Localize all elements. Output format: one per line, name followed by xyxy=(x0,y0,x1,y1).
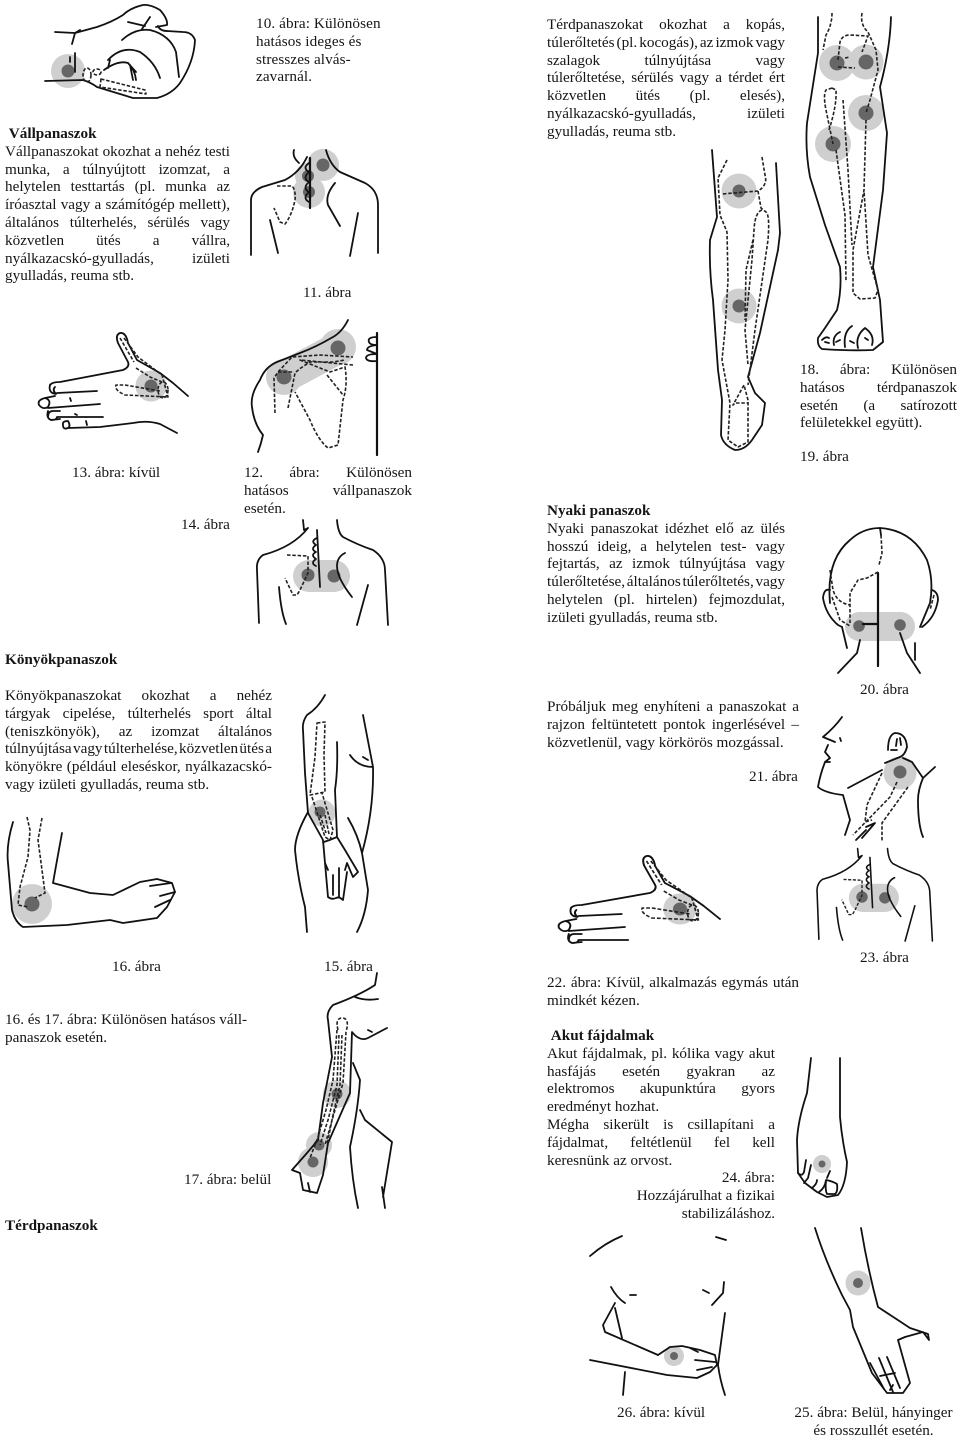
icon: figure 16 bent elbow xyxy=(8,817,175,927)
text block: acute pain: keresnünk az orvost. xyxy=(547,1152,672,1169)
caption: figure 20: 20. ábra xyxy=(860,681,909,698)
icon: figure 14 upper back xyxy=(257,520,388,625)
caption: figure 15: 15. ábra xyxy=(324,958,373,975)
icon: figure 26 abdomen with hand xyxy=(590,1236,726,1395)
icon: figure 12 shoulder xyxy=(252,320,377,455)
text block: neck complaints xyxy=(547,502,785,626)
icon: figure 25 hand and wrist xyxy=(815,1228,929,1393)
icon: figure 18 front leg xyxy=(806,13,891,350)
caption: figure 22 xyxy=(547,974,799,1009)
caption: figure 10: stresszes alvás- xyxy=(256,51,351,68)
text block: neck complaints: túlerőltetése, általános túlerőltetés, vagy xyxy=(547,573,785,590)
caption: figures 16 and 17: 16. és 17. ábra: Különösen hatásos váll- xyxy=(5,1011,247,1028)
caption: figure 17: 17. ábra: belül xyxy=(184,1171,271,1188)
caption: figure 10: 10. ábra: Különösen xyxy=(256,15,381,32)
text block: shoulder complaints: gyulladás, reuma stb. xyxy=(5,267,134,284)
text block: elbow causes: tárgyak cipelése, túlterhelés sport által xyxy=(5,705,272,722)
text block: elbow causes: (teniszkönyök), az izomzat általános xyxy=(5,723,272,740)
text block: elbow causes: könyökre (például eleséskor, nyálkazacskó- xyxy=(5,758,272,775)
text block: shoulder complaints: közvetlen ütés a vállra, xyxy=(5,232,230,249)
caption: figure 18: 18. ábra: Különösen xyxy=(800,361,957,378)
caption: figure 23: 23. ábra xyxy=(860,949,909,966)
caption: figures 16 and 17: panaszok esetén. xyxy=(5,1029,107,1046)
text block: neck complaints: fejtartás, az izmok túlnyújtása vagy xyxy=(547,555,785,572)
text block: stimulation advice: rajzon feltüntetett pontok ingerlésével – xyxy=(547,716,799,733)
text block: acute pain: eredményt hozhat. xyxy=(547,1098,659,1115)
icon: figure 13 hand xyxy=(39,333,188,433)
text block: acute pain: Akut fájdalmak xyxy=(551,1027,654,1044)
caption: figure 10: hatásos ideges és xyxy=(256,33,361,50)
icon: figure 19 back of leg xyxy=(710,150,780,450)
text block: acute pain: 24. ábra: xyxy=(722,1169,775,1186)
text block: acute pain: Hozzájárulhat a fizikai xyxy=(637,1187,775,1204)
caption: figure 14: 14. ábra xyxy=(181,516,230,533)
heading: knee complaints: Térdpanaszok xyxy=(5,1217,98,1234)
text block: acute pain: fájdalmat, feltétlenül fel kell xyxy=(547,1134,775,1151)
text block: acute pain: stabilizáláshoz. xyxy=(682,1205,775,1222)
text block: elbow causes: túlnyújtása vagy túlterhelése, közvetlen ütés a xyxy=(5,740,272,757)
text block: shoulder complaints: Vállpanaszok xyxy=(9,125,97,142)
text block: shoulder complaints: helytelen testtartás (pl. munka az xyxy=(5,178,230,195)
text block: shoulder complaints: általános túlterhelés, sérülés vagy xyxy=(5,214,230,231)
caption: figure 21: 21. ábra xyxy=(749,768,798,785)
text block: knee causes: szalagok túlnyújtása vagy xyxy=(547,52,785,69)
text block: neck complaints: Nyaki panaszok xyxy=(547,502,650,519)
heading: elbow complaints: Könyökpanaszok xyxy=(5,651,117,668)
caption: figure 25 xyxy=(794,1404,953,1438)
icon: figure 24 foot xyxy=(797,1058,847,1197)
text block: knee causes: túlerőltetés (pl. kocogás), az izmok vagy xyxy=(547,34,785,51)
text block: elbow causes: Könyökpanaszokat okozhat a nehéz xyxy=(5,687,272,704)
text block: knee causes: gyulladás, reuma stb. xyxy=(547,123,676,140)
caption: figure 12 xyxy=(244,464,412,517)
text block: shoulder complaints: munka, a túlnyújtott izomzat, a xyxy=(5,161,230,178)
caption: figure 18: hatásos térdpanaszok xyxy=(800,379,957,396)
text block: shoulder complaints: íróasztal vagy a számítógép mellett), xyxy=(5,196,230,213)
icon: figure 21 side of neck xyxy=(818,717,935,842)
text block: elbow causes xyxy=(5,687,272,793)
icon: figure 15 arm and torso xyxy=(295,695,373,932)
text block: acute pain: elektromos akupunktúra gyors xyxy=(547,1080,775,1097)
caption: figure 18: esetén (a satírozott xyxy=(800,397,957,414)
text block: neck complaints: izületi gyulladás, reuma stb. xyxy=(547,609,718,626)
text block: neck complaints: Nyaki panaszokat idézhet elő az ülés xyxy=(547,520,785,537)
caption: figure 12: esetén. xyxy=(244,500,286,517)
text block: acute pain xyxy=(547,1027,775,1222)
text block: neck complaints: hosszú ideig, a helytelen test- vagy xyxy=(547,538,785,555)
text block: knee causes: közvetlen ütés (pl. elesés), xyxy=(547,87,785,104)
caption: figure 19: 19. ábra xyxy=(800,448,849,465)
caption: figure 13: 13. ábra: kívül xyxy=(72,464,160,481)
text block: elbow causes: vagy izületi gyulladás, reuma stb. xyxy=(5,776,209,793)
caption: figures 16 and 17 xyxy=(5,1011,247,1046)
caption: figure 10 xyxy=(256,15,381,85)
text block: knee causes xyxy=(547,16,785,140)
text block: knee causes: nyálkazacskó-gyulladás, izületi xyxy=(547,105,785,122)
text block: acute pain: hasfájás esetén gyakran az xyxy=(547,1063,775,1080)
text block: stimulation advice: Próbáljuk meg enyhíteni a panaszokat a xyxy=(547,698,799,715)
text block: acute pain: Akut fájdalmak, pl. kólika vagy akut xyxy=(547,1045,775,1062)
caption: figure 22: 22. ábra: Kívül, alkalmazás egymás után xyxy=(547,974,799,991)
caption: figure 25: 25. ábra: Belül, hányinger xyxy=(794,1404,953,1421)
text block: stimulation advice: közvetlenül, vagy körkörös mozgással. xyxy=(547,734,784,751)
text block: knee causes: Térdpanaszokat okozhat a kopás, xyxy=(547,16,785,33)
icon: figure 23 upper back xyxy=(817,849,932,941)
icon: figure 11 neck and shoulders xyxy=(251,149,378,256)
caption: figure 26: 26. ábra: kívül xyxy=(617,1404,705,1421)
text block: knee causes: túlerőltetése, sérülés vagy a térdet ért xyxy=(547,69,785,86)
icon: figure 20 back of head xyxy=(823,528,938,673)
caption: figure 10: zavarnál. xyxy=(256,68,312,85)
caption: figure 12: 12. ábra: Különösen xyxy=(244,464,412,481)
icon: figure 10 head with pressure point xyxy=(45,5,195,98)
text block: neck complaints: helytelen (pl. hirtelen) fejmozdulat, xyxy=(547,591,785,608)
text block: acute pain: Mégha sikerült is csillapítani a xyxy=(547,1116,775,1133)
caption: figure 18: felületekkel együtt). xyxy=(800,414,922,431)
text block: stimulation advice xyxy=(547,698,800,751)
icon: figure 22 hand xyxy=(559,856,720,943)
caption: figure 16: 16. ábra xyxy=(112,958,161,975)
caption: figure 11: 11. ábra xyxy=(303,284,351,301)
caption: figure 22: mindkét kézen. xyxy=(547,992,640,1009)
text block: shoulder complaints: nyálkazacskó-gyulladás, izületi xyxy=(5,250,230,267)
text block: shoulder complaints xyxy=(5,125,230,284)
icon: figure 17 inner arm xyxy=(292,973,392,1208)
text block: shoulder complaints: Vállpanaszokat okozhat a nehéz testi xyxy=(5,143,230,160)
caption: figure 18 xyxy=(800,361,957,431)
caption: figure 12: hatásos vállpanaszok xyxy=(244,482,412,499)
